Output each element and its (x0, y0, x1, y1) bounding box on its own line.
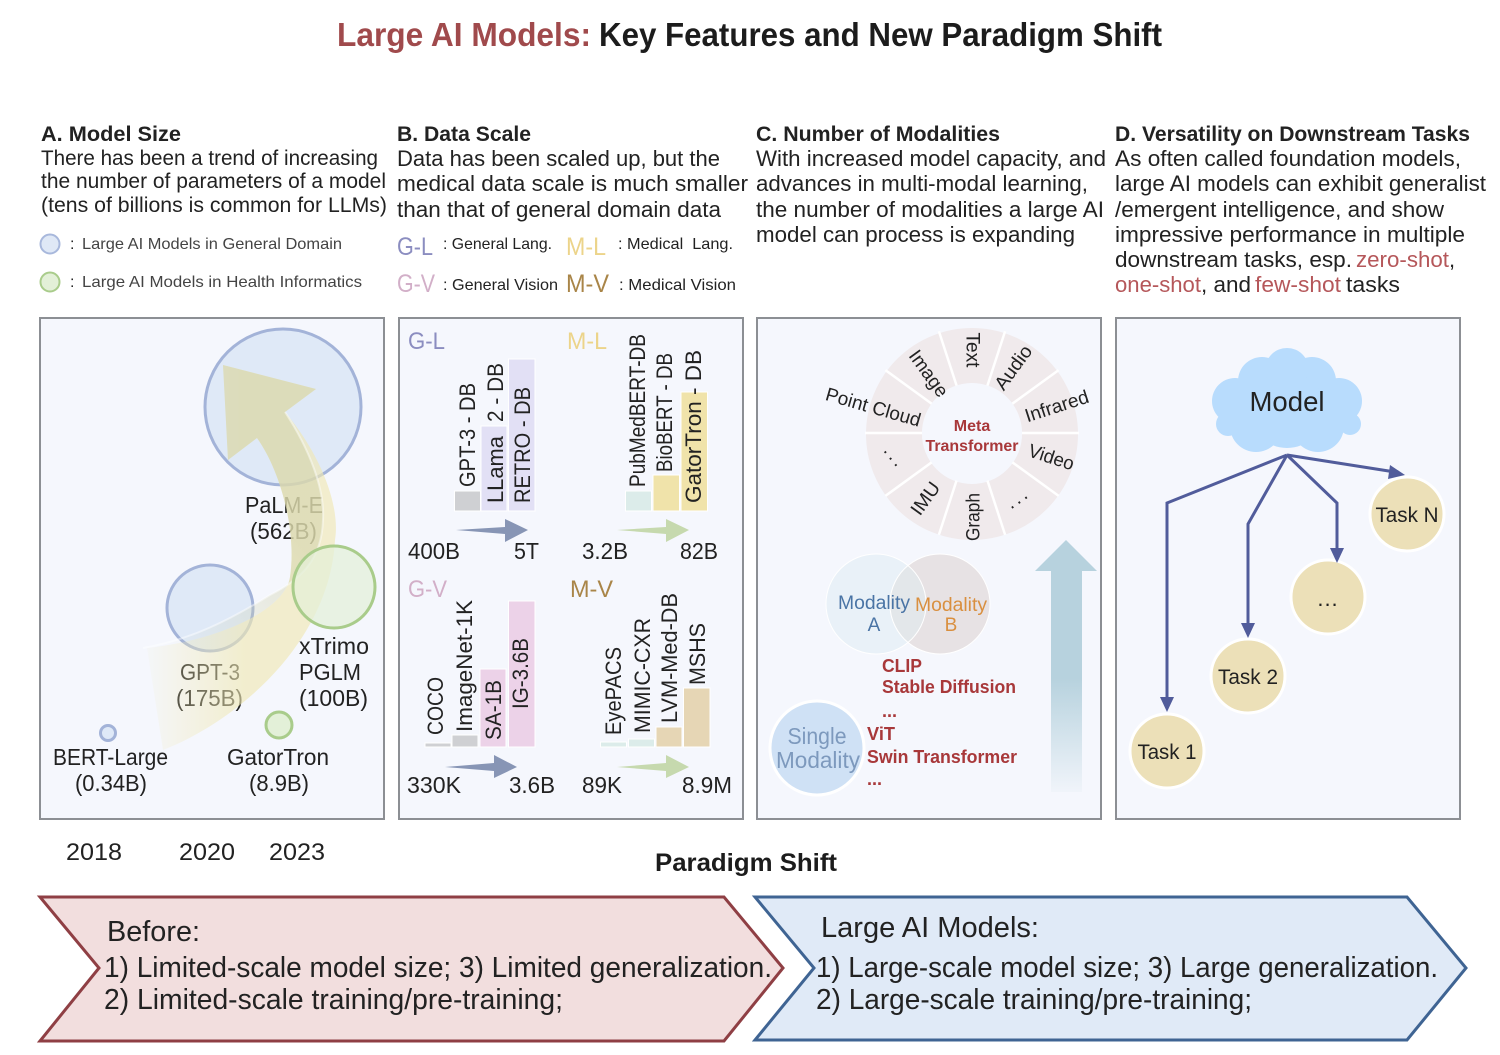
text block: A. Model Size: There has been a trend of increasing (41, 147, 378, 170)
text block: D. Versatility on Downstream Tasks: large AI models can exhibit generalist (1115, 171, 1486, 196)
model labels: (8.9B) (249, 770, 309, 796)
venn: modality A and B: B (945, 615, 957, 636)
chart: medical language: GatorTron - DB (681, 350, 706, 503)
icon: model cloud (1212, 348, 1362, 452)
chart: medical vision: 8.9M (682, 772, 732, 798)
model labels: (0.34B) (75, 770, 147, 796)
circle: ellipsis task (1291, 560, 1365, 634)
circle: single modality (770, 701, 864, 795)
chart: medical vision: EyePACS (601, 647, 626, 735)
text block: multimodal models: Stable Diffusion (882, 677, 1016, 697)
chart: general language: 400B (408, 538, 460, 564)
text block: C. Number of Modalities: the number of modalities a large AI (756, 197, 1104, 222)
chart: medical vision: MIMIC-CXR (630, 618, 655, 733)
legend: model domains (40, 234, 362, 292)
chart: meta transformer wheel: Text (962, 332, 982, 368)
text block: B. Data Scale: B. Data Scale (397, 123, 531, 146)
text block: B. Data Scale (397, 123, 748, 222)
year labels (66, 839, 325, 866)
year labels: 2023 (269, 839, 325, 866)
chart: medical vision: LVM-Med-DB (657, 593, 682, 723)
legend: data scale categories: : Medical Lang. (618, 236, 733, 253)
text block: D. Versatility on Downstream Tasks: D. Versatility on Downstream Tasks (1115, 123, 1470, 146)
model labels: (562B) (250, 518, 317, 544)
model labels (53, 492, 369, 796)
title: Key Features and New Paradigm Shift (599, 16, 1162, 53)
chart: medical vision: MSHS (685, 623, 710, 685)
text block: A. Model Size: the number of parameters of a model (41, 170, 386, 193)
circle: task N: Task N (1376, 504, 1438, 527)
chart: meta transformer wheel: Image (904, 346, 952, 402)
text block: D. Versatility on Downstream Tasks: one-shot (1115, 272, 1201, 297)
chart: general language: G-L (408, 328, 445, 355)
text block: multimodal models: CLIP (882, 656, 922, 676)
chart: medical language: PubMedBERT-DB (625, 334, 650, 487)
text block: C. Number of Modalities: model can process is expanding (756, 222, 1075, 247)
venn: modality A and B: A (868, 615, 881, 636)
legend: data scale categories: : General Lang. (443, 236, 552, 253)
venn: modality A and B: Modality (915, 595, 988, 616)
chart: general language: 5T (514, 538, 539, 564)
text block: single modality models: ViT (867, 724, 895, 744)
circle: task 1: Task 1 (1138, 741, 1196, 764)
text block: D. Versatility on Downstream Tasks: /emergent intelligence, and show (1115, 197, 1444, 222)
legend: data scale categories: M-V (566, 270, 609, 298)
chart: medical language: M-L (567, 328, 607, 355)
model labels: PaLM-E (245, 492, 323, 518)
text block: D. Versatility on Downstream Tasks: downstream tasks, esp. (1115, 247, 1352, 272)
chevron: large AI models: Large AI Models: (821, 912, 1039, 944)
label: model: Model (1250, 386, 1324, 417)
legend: model domains: Large AI Models in General Domain (82, 236, 342, 253)
title (337, 16, 1162, 53)
model labels: xTrimo (299, 633, 369, 659)
text block: C. Number of Modalities: With increased model capacity, and (756, 146, 1106, 171)
text block: C. Number of Modalities: C. Number of Modalities (756, 123, 1000, 146)
text block: A. Model Size (41, 123, 387, 217)
chevron: before: Before: (107, 916, 200, 948)
circle: single modality: Single (788, 723, 846, 749)
model labels: BERT-Large (53, 744, 168, 770)
text block: multimodal models: ... (882, 701, 897, 721)
chart: general vision: 3.6B (509, 772, 555, 798)
chart: medical language: 3.2B (582, 538, 628, 564)
text block: B. Data Scale: than that of general domain data (397, 197, 722, 222)
legend: data scale categories: M-L (566, 233, 606, 261)
chart: general vision (407, 576, 555, 798)
text block: D. Versatility on Downstream Tasks: impressive performance in multiple (1115, 222, 1465, 247)
model labels: GPT-3 (180, 659, 240, 685)
text block: single modality models: Swin Transformer (867, 747, 1017, 767)
model labels: (175B) (176, 685, 243, 711)
legend: model domains: : (70, 236, 74, 253)
circle: xTrimo PGLM (293, 546, 375, 628)
legend: model domains: Large AI Models in Health Informatics (82, 274, 362, 291)
text block: C. Number of Modalities: advances in multi-modal learning, (756, 171, 1088, 196)
chevron: before: 1) Limited-scale model size; 3) Limited generalization. (104, 952, 772, 984)
circle: GatorTron (266, 712, 292, 738)
chart: general language (408, 328, 539, 564)
chart: meta transformer wheel: ... (1002, 482, 1034, 514)
panel: model size (40, 318, 384, 819)
text block: B. Data Scale: Data has been scaled up, but the (397, 146, 720, 171)
text block: D. Versatility on Downstream Tasks: , (1449, 247, 1455, 272)
chart: meta transformer wheel: Transformer (926, 438, 1018, 455)
chart: meta transformer wheel: Graph (964, 493, 984, 541)
arrow: growth curve (143, 365, 336, 750)
chevron: large AI models (755, 897, 1466, 1040)
chart: medical vision: M-V (570, 576, 613, 603)
text block: D. Versatility on Downstream Tasks: , and (1201, 272, 1251, 297)
chevron: large AI models: 2) Large-scale training/pre-training; (816, 984, 1252, 1016)
text block: single modality models: ... (867, 769, 882, 789)
circle: BERT-Large (100, 726, 116, 740)
chevron: before: 2) Limited-scale training/pre-training; (104, 984, 563, 1016)
legend: data scale categories: : Medical Vision (619, 277, 736, 294)
arrows: model to tasks (1160, 455, 1405, 712)
arrow: increasing modalities (1035, 540, 1097, 792)
chart: general language: GPT-3 - DB (455, 383, 480, 487)
chart: meta transformer wheel: Video (1025, 441, 1077, 475)
circle: task N (1370, 477, 1444, 551)
chart: meta transformer wheel (823, 331, 1092, 541)
text block: D. Versatility on Downstream Tasks: zero-shot (1356, 247, 1449, 272)
panel: downstream tasks (1116, 318, 1460, 819)
text block: C. Number of Modalities (756, 123, 1106, 247)
legend: data scale categories: G-V (397, 270, 435, 298)
chart: general vision: ImageNet-1K (452, 600, 477, 732)
chart: general vision: COCO (423, 677, 448, 735)
title: Large AI Models: (337, 16, 591, 53)
text block: D. Versatility on Downstream Tasks: As often called foundation models, (1115, 146, 1461, 171)
year labels: 2018 (66, 839, 122, 866)
text block: B. Data Scale: medical data scale is much smaller (397, 171, 748, 196)
chart: medical vision (570, 576, 732, 798)
chart: meta transformer wheel: Infrared (1022, 387, 1092, 427)
chart: general language: LLama (483, 435, 508, 503)
year labels: 2020 (179, 839, 235, 866)
venn: modality A and B (826, 554, 990, 654)
chart: meta transformer wheel: Point Cloud (823, 384, 923, 432)
legend: data scale categories: G-L (397, 233, 433, 261)
chart: general vision: IG-3.6B (508, 638, 533, 709)
chart: general vision: 330K (407, 772, 462, 798)
circle: task 1 (1130, 714, 1204, 788)
chevron: large AI models: 1) Large-scale model size; 3) Large generalization. (816, 952, 1438, 984)
chart: medical language (567, 328, 718, 564)
legend: data scale categories: : General Vision (443, 277, 558, 294)
text block: D. Versatility on Downstream Tasks: tasks (1346, 272, 1400, 297)
chevron: before (40, 897, 783, 1041)
chart: medical language: 82B (680, 538, 718, 564)
chart: general vision: G-V (408, 576, 447, 603)
chart: general vision: SA-1B (481, 680, 506, 740)
text block: single modality models (867, 724, 1017, 789)
text block: multimodal models (882, 656, 1016, 721)
chart: meta transformer wheel: ... (879, 441, 911, 473)
text block: A. Model Size: A. Model Size (41, 123, 181, 146)
venn: modality A and B: Modality (838, 593, 911, 614)
model labels: (100B) (299, 685, 368, 711)
panel: modalities (757, 318, 1101, 819)
circle: ellipsis task: ... (1317, 586, 1339, 611)
circle: task 2: Task 2 (1218, 666, 1278, 689)
chart: general language: 2 - DB (483, 363, 508, 422)
chart: medical vision: 89K (582, 772, 623, 798)
legend: data scale categories (397, 233, 736, 298)
chart: medical language: BioBERT - DB (652, 353, 677, 472)
panel: data scale (399, 318, 743, 819)
circle: GPT-3 (167, 565, 253, 651)
model labels: PGLM (299, 659, 361, 685)
chart: meta transformer wheel: IMU (907, 478, 945, 520)
text block: A. Model Size: (tens of billions is common for LLMs) (41, 194, 387, 217)
text block: D. Versatility on Downstream Tasks (1115, 123, 1486, 297)
circle: PaLM-E (205, 329, 361, 485)
legend: model domains: : (70, 274, 74, 291)
heading: paradigm shift: Paradigm Shift (655, 849, 838, 877)
chart: meta transformer wheel: Meta (954, 418, 990, 435)
model labels: GatorTron (227, 744, 329, 770)
chart: meta transformer wheel: Audio (991, 342, 1037, 394)
text block: D. Versatility on Downstream Tasks: few-shot (1255, 272, 1341, 297)
circle: single modality: Modality (776, 747, 860, 773)
chart: general language: RETRO - DB (510, 387, 535, 503)
circle: task 2 (1211, 639, 1285, 713)
